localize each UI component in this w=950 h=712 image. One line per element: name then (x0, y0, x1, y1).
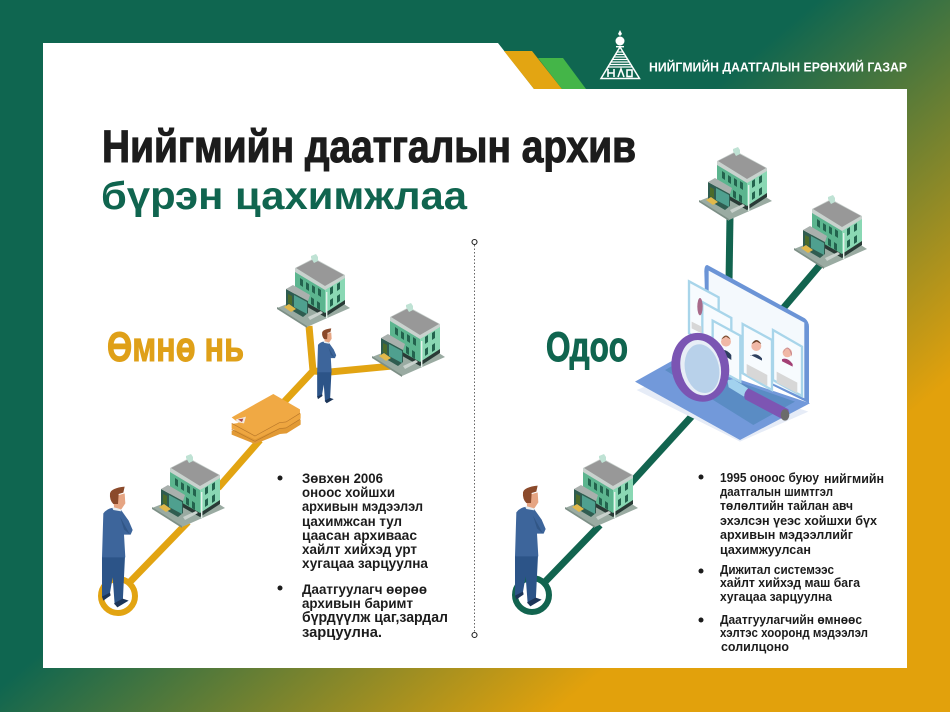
icon: building top (277, 254, 350, 328)
bullet list: now: хэлтэс хооронд мэдээлэл (720, 625, 868, 640)
bullet list: now: хайлт хийхэд маш бага (720, 575, 861, 590)
icon: laptop with profile cards and magnifier (635, 265, 810, 442)
bullet list: now (698, 470, 884, 654)
bullet list: now: нийгмийн (824, 471, 884, 486)
heading: now: Одоо (546, 323, 628, 370)
bullet list: now: солилцоно (721, 639, 789, 654)
bullet list: before: Зөвхөн 2006 (302, 471, 383, 486)
bullet list: before: архивын баримт (302, 596, 413, 611)
bullet list: now: төлөлтийн тайлан авч (720, 498, 853, 513)
white content panel (43, 43, 907, 668)
bullet list: now: эхэлсэн үеэс хойшхи бүх (720, 513, 878, 528)
person: small, at hub (317, 328, 336, 403)
bullet list: before (278, 471, 448, 641)
bullet list: before: бүрдүүлж цаг,зардал (302, 610, 448, 626)
locator ring: before (101, 579, 135, 613)
bullet list: now: цахимжуулсан (720, 542, 811, 557)
bullet list: before: цаасан архиваас (302, 528, 417, 543)
person: before, on ring (102, 487, 133, 607)
bullet list: before: зарцуулна. (302, 625, 382, 641)
bullet list: before: архивын мэдээлэл (302, 499, 423, 514)
bullet list: now: хугацаа зарцуулна (720, 589, 833, 604)
bullet list: now: архивын мэдээллийг (720, 527, 854, 542)
icon: building lower (152, 454, 225, 528)
locator ring: now (515, 578, 549, 612)
bullet list: before: хайлт хийхэд урт (302, 542, 417, 557)
header stripe: gold (504, 51, 562, 89)
icon: paper folder stack (232, 394, 301, 444)
bullet list: before: хугацаа зарцуулна (302, 556, 428, 571)
organization name: НИЙГМИЙН ДААТГАЛЫН ЕРӨНХИЙ ГАЗАР (649, 60, 907, 74)
bullet list: before: Даатгуулагч өөрөө (302, 582, 427, 597)
icon: building right (372, 303, 445, 377)
center dotted divider (472, 240, 477, 638)
header stripe: green (538, 58, 586, 89)
bullet list: before: цахимжсан тул (302, 514, 402, 529)
bullet list: before: оноос хойшхи (302, 485, 395, 500)
network lines: before (128, 326, 392, 584)
icon: building lower (565, 454, 638, 528)
person: now, on ring (515, 486, 546, 606)
title line 1: Нийгмийн даатгалын архив (102, 121, 636, 172)
icon: organization logo (601, 30, 640, 78)
icon: building right (794, 195, 867, 269)
bullet list: now: Даатгуулагчийн өмнөөс (720, 612, 862, 627)
bullet list: now: даатгалын шимтгэл (720, 484, 833, 499)
network lines: now (543, 216, 820, 584)
bullet list: now: 1995 оноос буюу (720, 470, 820, 485)
bullet list: now: Дижитал системээс (720, 562, 834, 577)
icon: building top (699, 147, 772, 221)
title line 2: бүрэн цахимжлаа (101, 175, 467, 218)
heading: before: Өмнө нь (107, 323, 244, 370)
